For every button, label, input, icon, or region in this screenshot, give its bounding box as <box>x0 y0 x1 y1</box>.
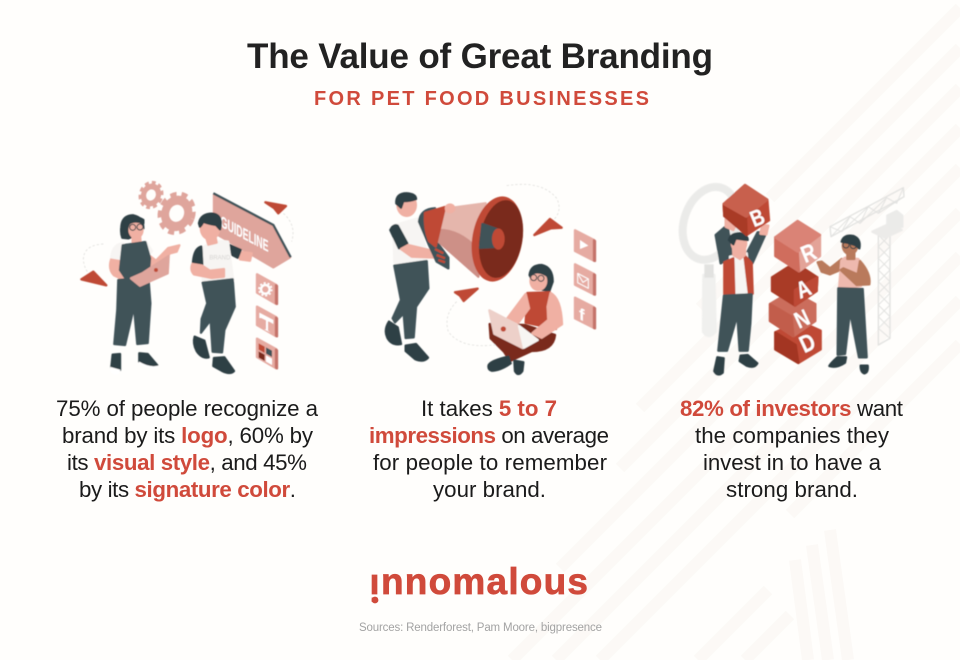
icon: paper planes <box>81 202 286 285</box>
letter block D <box>775 321 821 363</box>
text block: impressions statistic <box>369 396 609 502</box>
panel: megaphone illustration <box>386 184 595 374</box>
subtitle: FOR PET FOOD BUSINESSES <box>314 88 649 110</box>
guideline sign <box>213 193 291 267</box>
text block: logo statistic: its visual style, and 45% <box>67 450 307 475</box>
text block: logo statistic <box>56 396 319 502</box>
letter block B <box>724 185 769 235</box>
letter block B: B <box>747 204 769 232</box>
sources: Sources: Renderforest, Pam Moore, bigpresence <box>359 622 602 634</box>
man pointing <box>191 214 252 373</box>
text block: investors statistic: the companies they <box>695 423 890 448</box>
text block: impressions statistic: impressions on average <box>369 423 609 448</box>
text block: logo statistic: brand by its logo, 60% by <box>62 423 314 448</box>
woman at blocks <box>818 236 870 373</box>
panel: logo recognition illustration <box>81 180 293 374</box>
dashed paths <box>83 213 293 272</box>
text block: logo statistic: 75% of people recognize a <box>56 396 319 421</box>
man with megaphone <box>386 193 438 361</box>
title: The Value of Great Branding <box>247 37 713 76</box>
letter block A: A <box>792 275 815 304</box>
text block: investors statistic: 82% of investors want <box>680 396 904 421</box>
text block: impressions statistic: for people to remember <box>373 450 608 475</box>
logo: innomalous: nnomalous <box>381 561 588 602</box>
icon cards <box>257 274 277 368</box>
logo: innomalous: i <box>369 567 380 608</box>
man pointing: BRAND <box>209 255 231 261</box>
guideline sign: GUIDELINE <box>221 212 269 256</box>
social icon cards: f <box>579 304 585 326</box>
icon: paper planes <box>455 219 562 301</box>
dashed paths <box>447 184 559 346</box>
letter block N: N <box>790 304 814 334</box>
megaphone <box>419 192 529 286</box>
text block: impressions statistic: It takes 5 to 7 <box>421 396 557 421</box>
magnifying glass <box>674 180 746 336</box>
letter block R: R <box>797 238 820 268</box>
letter block D: D <box>795 327 820 358</box>
text block: logo statistic: by its signature color. <box>79 477 296 502</box>
letter block R <box>775 221 820 271</box>
panel: brand blocks illustration <box>674 180 904 374</box>
text block: investors statistic <box>680 396 904 502</box>
social icon cards <box>575 230 595 328</box>
text block: impressions statistic: your brand. <box>433 477 546 502</box>
construction crane <box>830 188 904 345</box>
text block: investors statistic: invest in to have a <box>703 450 882 475</box>
man lifting block B <box>714 213 768 374</box>
letter block A <box>772 263 817 306</box>
woman with laptop <box>110 215 179 374</box>
woman with laptop <box>488 265 562 374</box>
text block: investors statistic: strong brand. <box>726 477 858 502</box>
icon: gears <box>137 180 199 237</box>
letter block N <box>770 291 815 336</box>
